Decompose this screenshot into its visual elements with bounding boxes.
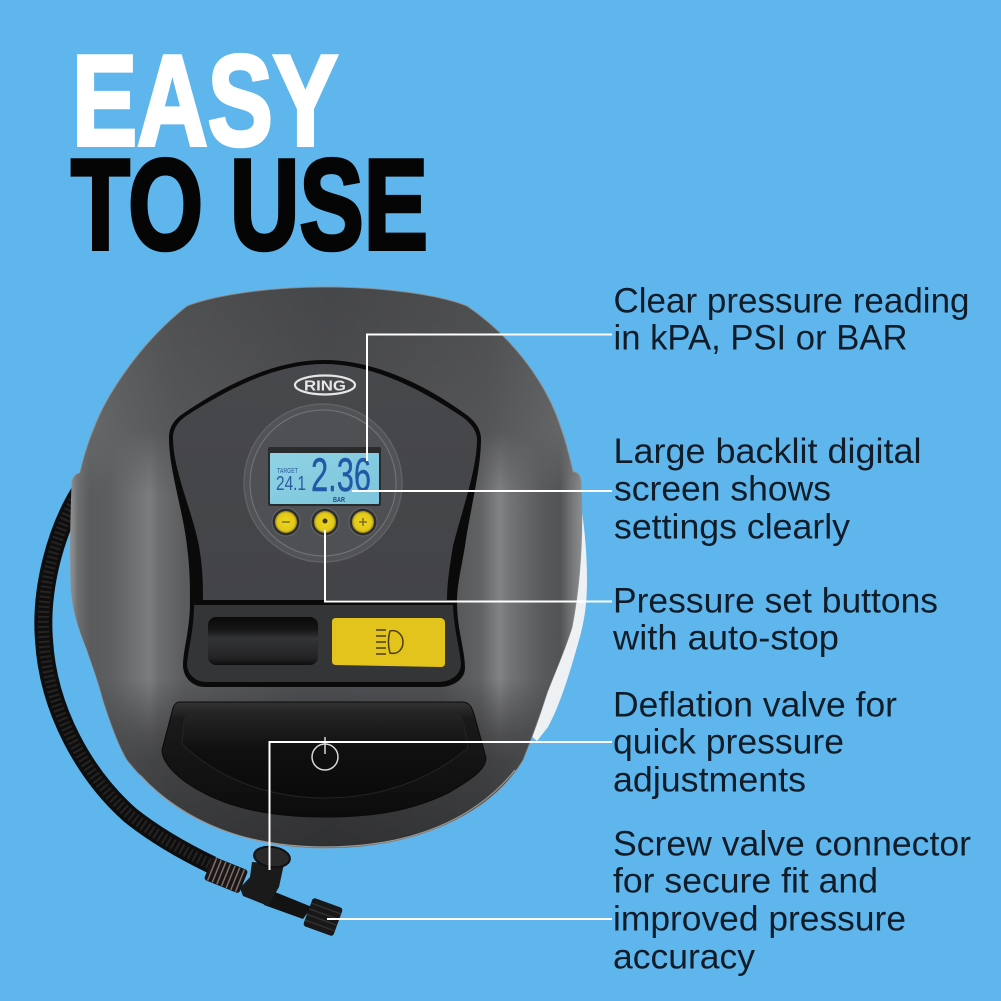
top cap	[253, 845, 291, 869]
air hose	[43, 488, 212, 865]
lower handle	[162, 702, 486, 817]
left recess	[208, 617, 318, 665]
spring collar	[204, 856, 248, 894]
white side coil	[530, 488, 587, 741]
brand logo: RING	[304, 378, 346, 394]
light button	[332, 618, 445, 667]
callout: screw connector: accuracy	[613, 938, 755, 976]
LCD screen: 2.36	[311, 448, 371, 501]
title: EASY	[72, 29, 338, 173]
callout: digital screen: screen shows	[614, 470, 831, 508]
shell shading	[71, 287, 582, 848]
callout: deflation valve	[613, 686, 897, 800]
outlet tube	[264, 890, 312, 919]
callout: screw connector: improved pressure	[613, 900, 906, 938]
power icon	[312, 737, 338, 770]
callout: screw connector	[613, 824, 971, 976]
callout: digital screen: Large backlit digital	[614, 432, 922, 471]
LCD screen: BAR	[333, 497, 345, 504]
callout: set buttons	[612, 582, 938, 658]
callout: pressure reading: Clear pressure reading	[614, 282, 970, 320]
callout: digital screen: settings clearly	[614, 508, 851, 546]
valve connector	[204, 845, 343, 937]
knurled nut	[303, 897, 343, 937]
callout: deflation valve: Deflation valve for	[613, 686, 897, 724]
callout: pressure reading	[614, 282, 970, 358]
title: TO USE	[71, 133, 428, 277]
shell	[71, 287, 582, 848]
panel face	[173, 364, 477, 600]
LCD screen: TARGET	[277, 468, 299, 475]
buttons	[272, 508, 377, 536]
control panel	[169, 360, 481, 687]
lower tray	[187, 605, 461, 682]
LCD screen	[270, 448, 379, 504]
callout: screw connector: Screw valve connector	[613, 824, 971, 864]
lower edge line	[140, 770, 515, 847]
callout: deflation valve: adjustments	[613, 760, 806, 800]
callout: set buttons: Pressure set buttons	[613, 582, 938, 620]
callout: deflation valve: quick pressure	[613, 722, 844, 762]
handle inner face	[182, 715, 468, 798]
dial ring	[244, 404, 402, 562]
display bezel	[268, 447, 381, 506]
T body	[240, 862, 284, 906]
callout: screw connector: for secure fit and	[613, 862, 878, 900]
callout lines	[270, 334, 612, 919]
brand logo	[295, 376, 355, 394]
callout: pressure reading: in kPA, PSI or BAR	[614, 318, 908, 358]
callout: digital screen	[614, 432, 922, 546]
side lobes	[71, 441, 581, 741]
callout: set buttons: with auto-stop	[612, 618, 839, 658]
LCD screen: 24.1	[276, 473, 306, 495]
compressor body	[71, 287, 587, 848]
title	[71, 29, 428, 277]
